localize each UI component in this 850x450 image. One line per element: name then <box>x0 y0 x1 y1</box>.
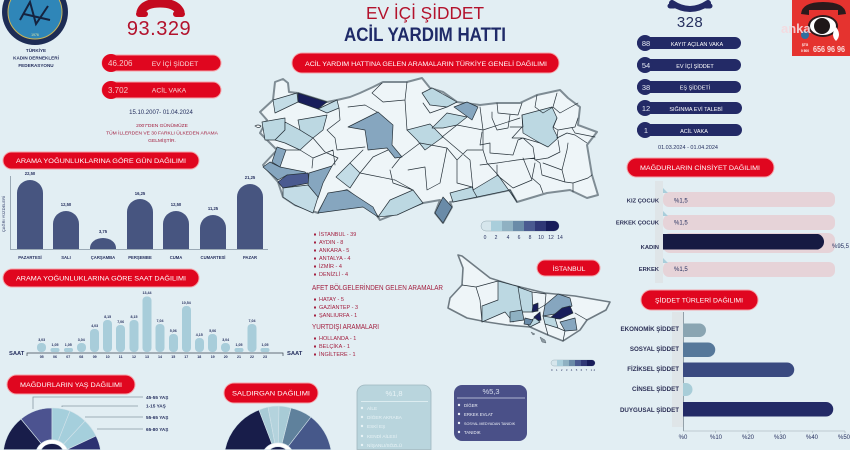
bar chart: calls by hour: 08 <box>79 355 83 359</box>
map legend: Turkey: 10 <box>538 235 544 241</box>
bar chart: calls by hour: 20 <box>224 355 228 359</box>
bar chart: calls by day: 22,50 <box>25 171 36 176</box>
bar chart: calls by hour: 15 <box>171 355 175 359</box>
bar chart: gender: KADIN <box>641 245 659 251</box>
list: disaster region calls <box>312 283 443 319</box>
bar chart: calls by hour: SAAT <box>287 351 303 357</box>
donut chart: age <box>4 408 100 450</box>
federation name: TÜRKİYE <box>26 47 46 53</box>
list: calls from abroad: HOLLANDA - 1 <box>319 336 356 342</box>
donut chart: perpetrators <box>225 406 331 450</box>
heading: Istanbul: İSTANBUL <box>552 264 586 273</box>
map legend: Turkey: 6 <box>518 235 521 241</box>
heading: perpetrators: SALDIRGAN DAĞILIMI <box>232 388 310 398</box>
heading: hourly distribution: ARAMA YOĞUNLUKLARINA GÖRE SAAT DAĞILIMI <box>16 274 186 282</box>
bar chart: calls by hour: 17 <box>184 355 188 359</box>
map legend: Turkey: 12 <box>548 235 554 241</box>
panel: 5.3 percent perpetrators: %5,3 <box>482 387 500 396</box>
bar chart: calls by day <box>1 171 268 260</box>
bar chart: calls by day: PAZARTESİ <box>18 255 42 260</box>
list: disaster region calls: HATAY - 5 <box>319 297 344 303</box>
bar chart: gender: ERKEK ÇOCUK <box>616 220 660 226</box>
bar chart: gender: %1,5 <box>674 220 688 226</box>
bar chart: violence types: %20 <box>742 435 755 441</box>
bar chart: calls by hour: 09 <box>93 355 97 359</box>
bar chart: calls by day: 21,25 <box>245 175 256 180</box>
heading: violence types <box>641 290 758 310</box>
bar chart: gender: KIZ ÇOCUK <box>627 198 660 204</box>
list: disaster region calls: AFET BÖLGELERİNDEN GELEN ARAMALAR <box>312 283 443 292</box>
heading: perpetrators <box>224 383 318 403</box>
bar chart: calls by hour: 4,03 <box>91 324 98 328</box>
bar chart: calls by hour: 19 <box>211 355 215 359</box>
bar chart: violence types: %40 <box>806 435 819 441</box>
stat list: last month: KAYIT AÇILAN VAKA <box>671 42 723 48</box>
bar chart: gender: %1,5 <box>674 267 688 273</box>
heading: Istanbul <box>537 260 600 276</box>
map legend: Istanbul: 0 1 2 3 4 5 6 7 14 <box>551 368 595 372</box>
bar chart: gender: ERKEK <box>639 267 660 273</box>
icon: navy telephone <box>670 3 710 9</box>
bar chart: calls by hour: 3,03 <box>38 338 45 342</box>
list: province call counts <box>314 231 356 278</box>
bar chart: gender: %1,5 <box>674 198 688 204</box>
bar chart: calls by day: SALI <box>61 255 71 260</box>
bar chart: violence types: %30 <box>774 435 787 441</box>
bar chart: gender: %95,5 <box>832 244 850 250</box>
bar chart: calls by hour: 4,15 <box>196 333 203 337</box>
age labels: 1-15 YAŞ <box>146 404 166 408</box>
bar chart: calls by hour: 8,15 <box>130 315 138 319</box>
list: calls from abroad: YURTDIŞI ARAMALARI <box>312 322 379 331</box>
list: calls from abroad <box>312 322 379 358</box>
bar chart: calls by hour: 21 <box>237 355 241 359</box>
bar chart: calls by hour: 23 <box>263 355 267 359</box>
heading: Turkey map: ACİL YARDIM HATTINA GELEN ARAMALARIN TÜRKİYE GENELİ DAĞILIMI <box>305 59 547 68</box>
federation name: KADIN DERNEKLERİ <box>13 54 59 60</box>
bar chart: calls by hour: 05 <box>40 355 44 359</box>
heading: daily distribution <box>3 152 199 169</box>
panel: 1.8 percent perpetrators: NİŞANLI/SÖZLÜ <box>367 442 403 448</box>
list: province call counts: İSTANBUL - 39 <box>319 231 356 238</box>
hotline logo: 656 96 96 <box>813 44 845 54</box>
bar chart: calls by hour: 1,05 <box>236 343 242 347</box>
map legend: Turkey: 14 <box>557 235 563 241</box>
note: GELMİŞTİR. <box>148 137 176 144</box>
title: ACİL YARDIM HATTI <box>344 25 506 46</box>
heading: age distribution <box>7 375 135 394</box>
stat list: last month <box>637 35 742 138</box>
map legend: Turkey: 0 <box>484 235 487 241</box>
bar chart: violence types: SOSYAL ŞİDDET <box>630 346 679 353</box>
stat list: last month: SIĞINMA EVİ TALEBİ <box>669 106 723 113</box>
hotline logo: ŞTG <box>802 43 809 47</box>
map legend: Turkey: 8 <box>529 235 532 241</box>
bar chart: calls by hour: 3,04 <box>78 338 85 342</box>
bar chart: calls by day: 12,50 <box>61 202 72 207</box>
list: province call counts: AYDIN - 8 <box>319 240 343 246</box>
heading: violence types: ŞİDDET TÜRLERİ DAĞILIMI <box>655 296 743 304</box>
date range: 15.10.2007- 01.04.2024 <box>129 110 194 116</box>
title <box>344 3 506 46</box>
bar chart: violence types <box>620 312 850 441</box>
age labels: 55-65 YAŞ <box>146 415 168 420</box>
bar chart: violence types: FİZİKSEL ŞİDDET <box>627 366 679 373</box>
bar chart: calls by day: 3,75 <box>99 229 108 234</box>
bar chart: calls by hour: 13,44 <box>142 291 152 295</box>
panel: 1.8 percent perpetrators: AİLE <box>367 405 377 411</box>
list: province call counts: DENİZLİ - 4 <box>319 271 348 278</box>
panel: 5.3 percent perpetrators: TANIDIK <box>464 430 481 435</box>
panel: 1.8 percent perpetrators: %1,8 <box>385 389 403 398</box>
bar chart: calls by hour: 5,06 <box>170 329 177 333</box>
bar chart: calls by hour: 1,05 <box>52 343 58 347</box>
bar chart: calls by day: PAZAR <box>243 255 257 260</box>
bar chart: calls by day: PERŞEMBE <box>128 255 152 260</box>
bar chart: calls by hour: 12 <box>132 355 136 359</box>
bar chart: violence types: %10 <box>710 435 723 441</box>
bar chart: calls by day: 12,50 <box>171 202 182 207</box>
list: disaster region calls: GAZİANTEP - 3 <box>319 304 358 311</box>
stat list: last month: 12 <box>642 104 650 113</box>
bar chart: calls by hour: 10 <box>106 355 110 359</box>
panel: 5.3 percent perpetrators <box>454 385 527 441</box>
bar chart: violence types: DUYGUSAL ŞİDDET <box>620 407 679 414</box>
age labels <box>33 395 168 432</box>
bar chart: calls by hour: 8,15 <box>104 315 111 319</box>
heading: hourly distribution <box>3 269 199 287</box>
bar chart: calls by hour <box>9 291 303 359</box>
bar chart: calls by day: ÇAĞRI YÜZDELERİ <box>1 196 6 232</box>
list: calls from abroad: BELÇİKA - 1 <box>319 343 350 350</box>
bar chart: calls by day: 16,25 <box>135 191 146 196</box>
bar chart: calls by hour: 18 <box>197 355 201 359</box>
note: TÜM İLLERDEN VE 30 FARKLI ÜLKEDEN ARAMA <box>106 130 219 136</box>
hotline logo: 0 500 <box>801 49 809 53</box>
age labels: 45-55 YAŞ <box>146 395 168 400</box>
stat list: last month: 88 <box>642 39 650 48</box>
stat: domestic violence: EV İÇİ ŞİDDET <box>152 59 198 68</box>
list: disaster region calls: ŞANLIURFA - 1 <box>319 313 357 319</box>
note <box>106 122 219 144</box>
panel: 5.3 percent perpetrators: DİĞER <box>464 403 478 408</box>
bar chart: violence types: %50 <box>838 435 850 441</box>
panel: 1.8 percent perpetrators: DİĞER AKRABA <box>367 414 403 420</box>
panel: 5.3 percent perpetrators: SOSYAL MEDYADAN TANIDIK <box>464 422 516 426</box>
map: Turkey provinces <box>255 78 598 223</box>
total calls: 93.329 <box>127 18 191 40</box>
panel: 1.8 percent perpetrators: KENDİ AİLESİ <box>367 433 397 439</box>
bar chart: calls by hour: 7,04 <box>156 319 164 323</box>
federation logo <box>2 0 68 45</box>
map legend: Turkey: 4 <box>507 235 510 241</box>
stat: emergency cases: 3.702 <box>108 86 129 95</box>
bar chart: calls by hour: 06 <box>53 355 57 359</box>
age labels: 65-80 YAŞ <box>146 427 168 432</box>
federation logo: 1976 <box>31 33 39 37</box>
bar chart: calls by day: 11,25 <box>208 206 219 211</box>
watermark: anka <box>781 21 811 36</box>
bar chart: calls by hour: 22 <box>250 355 254 359</box>
bar chart: calls by day: ÇARŞAMBA <box>91 255 115 260</box>
stat list: last month: 54 <box>642 61 650 70</box>
map legend: Istanbul <box>551 360 595 372</box>
monthly date range: 01.03.2024 - 01.04.2024 <box>658 145 718 151</box>
bar chart: gender <box>616 181 850 283</box>
bar chart: calls by hour: 13 <box>145 355 149 359</box>
list: province call counts: ANKARA - 5 <box>319 248 349 254</box>
panel: 1.8 percent perpetrators: ESKİ EŞ <box>367 423 385 429</box>
heading: gender distribution <box>627 158 774 177</box>
stat list: last month: ACİL VAKA <box>680 128 708 135</box>
panel: 5.3 percent perpetrators: ERKEK EVLAT <box>464 412 493 417</box>
map legend: Turkey: 2 <box>495 235 498 241</box>
list: calls from abroad: İNGİLTERE - 1 <box>319 351 356 358</box>
bar chart: calls by hour: 14 <box>158 355 162 359</box>
bar chart: calls by hour: 3,04 <box>222 338 229 342</box>
stat list: last month: EV İÇİ ŞİDDET <box>676 63 714 70</box>
bar chart: calls by hour: 11 <box>119 355 123 359</box>
bar chart: calls by hour: 7,04 <box>248 319 256 323</box>
bar chart: violence types: %0 <box>679 435 688 441</box>
stat: domestic violence: 46.206 <box>108 59 133 68</box>
title: EV İÇİ ŞİDDET <box>366 3 484 23</box>
bar chart: calls by hour: 07 <box>66 355 70 359</box>
hotline logo <box>792 0 850 56</box>
bar chart: violence types: EKONOMİK ŞİDDET <box>621 326 679 333</box>
bar chart: calls by hour: 1,05 <box>262 343 268 347</box>
list: province call counts: İZMİR - 4 <box>319 263 342 270</box>
bar chart: calls by hour: 5,06 <box>209 329 216 333</box>
bar chart: violence types: CİNSEL ŞİDDET <box>632 386 679 393</box>
heading: gender distribution: MAĞDURLARIN CİNSİYET DAĞILIMI <box>640 163 760 172</box>
stat: emergency cases: ACİL VAKA <box>152 86 187 94</box>
bar chart: calls by day: CUMA <box>170 255 182 260</box>
map legend: Turkey <box>481 221 563 241</box>
list: province call counts: ANTALYA - 4 <box>319 256 350 262</box>
icon: red telephone <box>139 3 182 14</box>
panel: 1.8 percent perpetrators <box>357 385 431 450</box>
stat list: last month: EŞ ŞİDDETİ <box>680 84 711 92</box>
note: 2007'DEN GÜNÜMÜZE <box>136 122 189 129</box>
heading: age distribution: MAĞDURLARIN YAŞ DAĞILIMI <box>20 380 122 389</box>
stat: domestic violence <box>102 54 221 72</box>
stat list: last month: 1 <box>644 126 648 135</box>
heading: Turkey map <box>292 53 559 73</box>
federation name <box>13 47 59 68</box>
stat: emergency cases <box>102 81 221 99</box>
monthly total: 328 <box>677 14 703 31</box>
federation name: FEDERASYONU <box>18 63 54 68</box>
bar chart: calls by hour: 7,06 <box>117 320 124 324</box>
bar chart: calls by day: CUMARTESİ <box>201 255 225 260</box>
bar chart: calls by hour: 10,54 <box>182 301 191 305</box>
stat list: last month: 38 <box>642 83 650 92</box>
bar chart: calls by hour: 1,05 <box>65 343 72 347</box>
bar chart: calls by hour: SAAT <box>9 351 25 357</box>
heading: daily distribution: ARAMA YOĞUNLUKLARINA GÖRE GÜN DAĞILIMI <box>16 156 186 165</box>
map: Istanbul districts <box>448 255 610 343</box>
